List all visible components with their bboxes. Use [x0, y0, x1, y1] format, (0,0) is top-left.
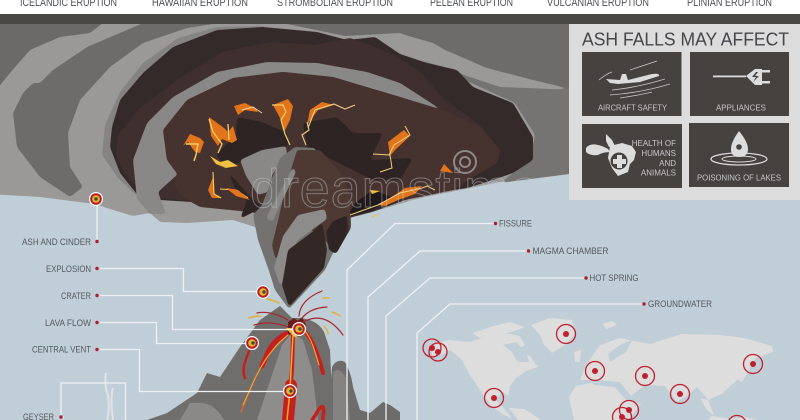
lava spatter: [254, 291, 343, 335]
right mid grey: [395, 48, 585, 183]
flame 1: [183, 134, 204, 161]
geyser steam: [105, 373, 113, 420]
foothill: [180, 403, 224, 420]
card text: AND: [659, 159, 676, 168]
icon: airplane: [599, 61, 670, 98]
label: fissure: FISSURE: [499, 218, 532, 228]
column dark right: [326, 215, 348, 254]
card text: ANIMALS: [641, 168, 676, 178]
label: explosion: EXPLOSION: [46, 264, 91, 274]
flame 9: [440, 164, 453, 173]
grey lump: [240, 146, 287, 195]
card: aircraft safety: [582, 52, 682, 116]
watermark: dreamstime: [250, 159, 540, 219]
flames: [183, 99, 453, 218]
card: appliances: [690, 52, 789, 116]
lakes and bays: [503, 340, 632, 388]
upper-right light band: [398, 33, 575, 90]
dark lump lower: [227, 170, 263, 219]
inner brown core: [163, 72, 500, 222]
card: poisoning of lakes: POISONING OF LAKES: [697, 172, 781, 182]
crater lava: [288, 317, 306, 336]
eruption type labels: [20, 0, 772, 9]
marker: central vent: [283, 384, 297, 398]
marker: crater: [292, 322, 306, 336]
upper-right grey ash: [220, 10, 585, 92]
marker: lava flow: [245, 336, 259, 350]
flame 2: [209, 117, 237, 153]
dark cap: [110, 27, 533, 218]
lava streams: [241, 330, 324, 420]
dark lump right: [303, 117, 413, 180]
card: poisoning of lakes: [689, 123, 789, 187]
column light streak: [274, 209, 327, 288]
column dark lower: [282, 222, 327, 307]
flame 10: [350, 186, 435, 218]
card text: HUMANS: [641, 149, 676, 158]
flame 6: [373, 126, 410, 172]
marker: explosion: [256, 285, 270, 299]
map volcano markers: [423, 324, 762, 420]
light grey band: [133, 62, 445, 214]
flame 3: [234, 103, 262, 115]
column brown core: [272, 150, 351, 262]
flame 4: [272, 99, 293, 145]
label: crater: CRATER: [61, 291, 91, 301]
dark lump left: [216, 117, 288, 170]
yellow spatter: [249, 298, 340, 334]
marker: ash and cinder: [89, 192, 103, 206]
label: groundwater: GROUNDWATER: [648, 299, 712, 309]
label: central vent: CENTRAL VENT: [32, 344, 91, 354]
label: lava flow: LAVA FLOW: [45, 318, 91, 328]
cone light face: [257, 333, 318, 420]
inner grey crescent: [13, 20, 240, 197]
dark edge lower right: [347, 190, 395, 217]
panel: ash falls may affect: [569, 24, 800, 200]
column light strip: [266, 167, 296, 222]
icon: turtle and head with cross: [586, 134, 636, 176]
watermark spiral: [454, 151, 476, 173]
volcano: [147, 291, 400, 420]
back ridge: [328, 361, 400, 420]
label: magma chamber: MAGMA CHAMBER: [532, 246, 609, 256]
top header strip: [0, 0, 800, 24]
outer pale ash: [0, 15, 585, 232]
card text: [632, 139, 676, 178]
mid grey ring: [102, 26, 300, 199]
dark ash corner top-left: [0, 10, 120, 100]
card: appliances: APPLIANCES: [716, 102, 766, 112]
panel title: ASH FALLS MAY AFFECT: [582, 28, 789, 50]
card: aircraft safety: AIRCRAFT SAFETY: [598, 102, 667, 112]
eruption column: [253, 147, 350, 309]
world map: [432, 318, 773, 420]
card text: HEALTH OF: [632, 139, 676, 148]
flame 8: [208, 172, 250, 200]
volcanic ash cloud: [0, 10, 585, 309]
label: hot spring: HOT SPRING: [590, 273, 638, 283]
flame 7: [210, 156, 238, 168]
icon: electric plug: [713, 69, 770, 85]
label: ash and cinder: ASH AND CINDER: [22, 237, 91, 247]
brown layer: [116, 38, 500, 205]
leader lines: [61, 205, 643, 420]
icon: poison drop with ripples: [711, 131, 767, 165]
card: health of humans and animals: [582, 124, 682, 188]
flame 5: [302, 102, 355, 145]
main cone: [147, 306, 333, 420]
